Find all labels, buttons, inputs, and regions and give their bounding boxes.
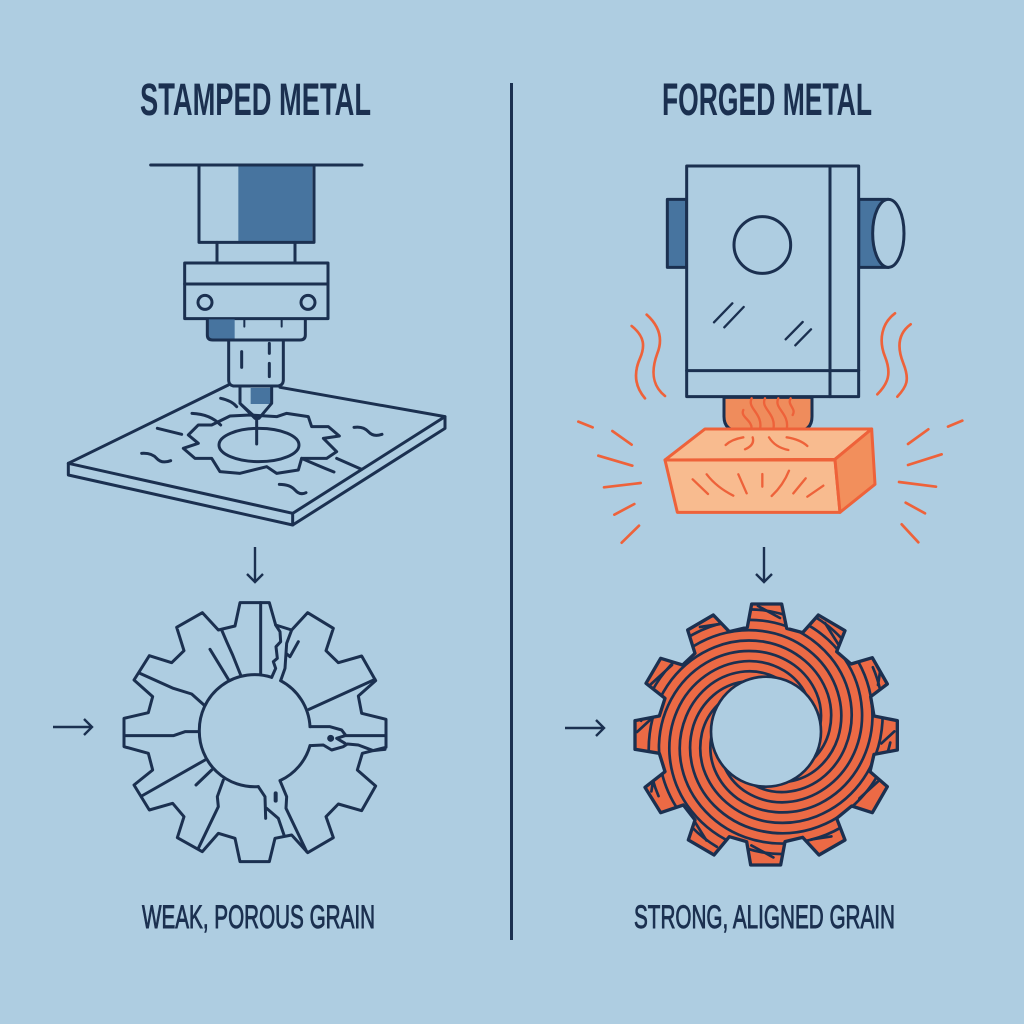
forged gear with aligned grain: [633, 602, 899, 867]
cracked gear: [124, 603, 386, 862]
caption: weak porous grain: WEAK, POROUS GRAIN: [142, 899, 375, 935]
arrow: down left: [247, 547, 263, 582]
center divider: [510, 83, 513, 940]
forging machine body: [667, 166, 904, 397]
heading: forged metal: FORGED METAL: [662, 74, 872, 125]
heading: stamped metal: STAMPED METAL: [140, 74, 371, 125]
glowing billet: [665, 429, 872, 460]
illustration: stamping press and cracked sheet: [68, 165, 445, 525]
arrow: down right: [756, 547, 772, 582]
sparks: [578, 421, 962, 543]
illustration: forging press and glowing billet: [578, 166, 962, 543]
arrow: right forged: [565, 720, 604, 736]
hot die: [724, 397, 812, 431]
heat waves: [632, 313, 911, 398]
arrow: right left: [53, 719, 92, 735]
